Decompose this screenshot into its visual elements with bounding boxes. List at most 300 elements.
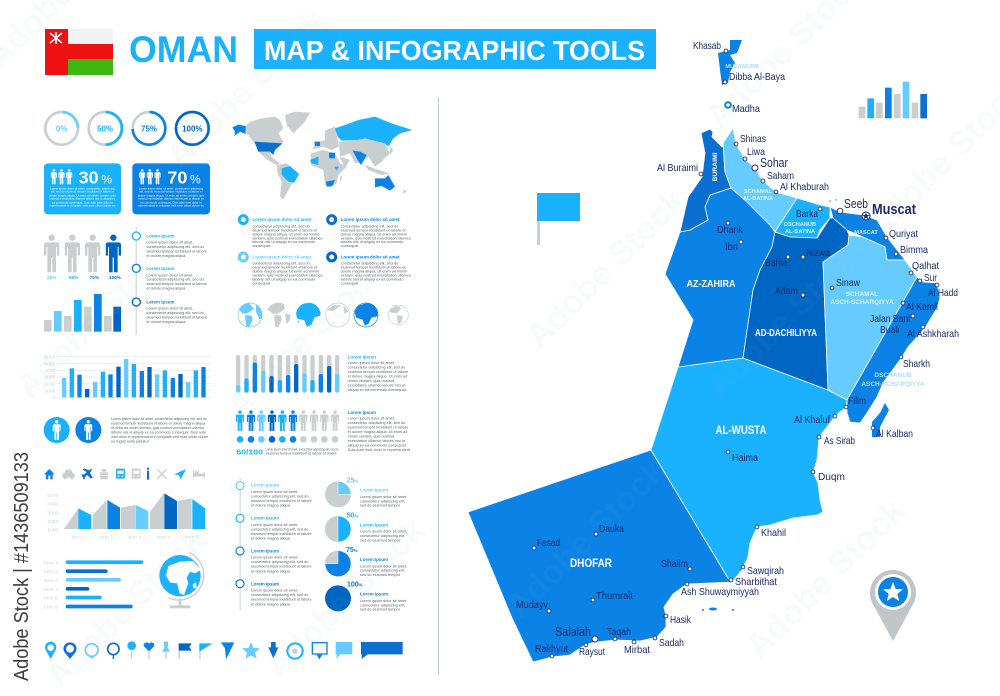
area column chart: 2000- — [47, 519, 60, 525]
icon: ring pin dark — [108, 643, 119, 659]
region labels: SCHAMAL — [744, 189, 773, 195]
city labels: Bimma — [900, 245, 928, 256]
city labels: Shinas — [740, 134, 766, 145]
small islands — [702, 199, 837, 611]
bullet text block 2: laboris nisi ut aliquip ex ea commodo — [341, 240, 403, 244]
city labels: Jalan Bani — [870, 314, 910, 325]
stat box 30%: reprehenderit in voluptate velit esse cillum dolore eu — [49, 204, 116, 208]
city labels: Ash Shuwaymiyyah — [681, 587, 759, 598]
bullet text block 4: consequat — [341, 281, 359, 285]
region labels: MUSANDAM — [725, 64, 759, 70]
city labels: Taqah — [607, 627, 631, 638]
small column chart top right — [859, 82, 927, 118]
city labels: Dhank — [717, 225, 744, 236]
region labels: BURAIMI — [712, 152, 719, 182]
paragraph beside badges: Ut enim ad minim veniam, quis nostrud exercitation ullamco — [111, 426, 204, 430]
city labels: Dibba Al-Baya — [729, 72, 785, 83]
stat box 70%: Lorem ipsum dolor sit amet, consectetur adipiscing — [139, 186, 204, 190]
pie 50%: sed do eiusmod tempor — [360, 538, 401, 542]
stat box 70%: 70 — [167, 168, 187, 188]
divider line — [438, 98, 439, 675]
area column chart: Item 5 — [185, 535, 199, 541]
vertical timeline: et dolore magna aliqua — [146, 254, 186, 258]
horizontal item bars: Item 2 — [44, 569, 58, 575]
bullet text block 4: Lorem ipsum dolor sit amet — [341, 254, 400, 259]
timeline with four steps: consectetur adipiscing elit, sed do — [251, 593, 308, 597]
pie 100%: Lorem Ipsum — [360, 592, 388, 597]
city labels: Ibri — [725, 242, 738, 253]
bullet text block 3: dolore magna aliqua. Ut enim ad minim — [252, 270, 319, 274]
people row 60 of 100: eiusmod tempor incididunt ut labore et dolore — [266, 451, 337, 455]
region labels: DSCHANUB — [874, 372, 912, 379]
pie 75%: Lorem Ipsum — [360, 557, 388, 562]
bullet text block 4: laboris nisi ut aliquip ex ea commodo — [341, 277, 403, 281]
pie 50%: consectetur adipiscing elit, — [360, 534, 405, 538]
city labels: Adam — [775, 286, 798, 297]
horizontal item bars: Item 5 — [44, 596, 58, 602]
stat box 30%: elit, sed do eiusmod tempor incididunt ut labore et — [51, 190, 114, 194]
stat box 70%: elit, sed do eiusmod tempor incididunt ut labore et — [139, 190, 203, 194]
pie 25%: consectetur adipiscing elit, — [360, 499, 405, 503]
city labels: Sharbithat — [735, 577, 777, 588]
bullet text block 1 — [239, 216, 323, 248]
pie 75%: sed do eiusmod tempor — [360, 573, 401, 577]
pie 75% — [325, 547, 407, 577]
donut 75% — [133, 112, 165, 145]
timeline with four steps: et dolore magna aliqua — [251, 504, 291, 508]
city labels: Sinaw — [836, 278, 861, 289]
text beside people row: Duis aute irure dolor in reprehenderit — [348, 448, 411, 452]
stat box 70%: dolore magna aliqua. Ut enim ad minim veniam, quis — [138, 193, 205, 197]
stock credit vertical text: Adobe Stock | #1436509133 — [11, 452, 33, 681]
area column chart: Item 1 — [71, 535, 85, 541]
city labels — [516, 41, 959, 658]
people row 60 of 100 — [236, 410, 339, 456]
donut 100% — [176, 112, 209, 145]
stat box 30%: dolore magna aliqua. Ut enim ad minim veniam, quis — [49, 193, 116, 197]
stat box 70%: % — [190, 173, 201, 187]
pie 100%: sed do eiusmod tempor — [360, 608, 401, 612]
region labels: DHOFAR — [570, 556, 612, 570]
region labels: ASCH-SCHARQIYYA — [830, 299, 894, 306]
timeline with four steps: et dolore magna aliqua — [251, 602, 291, 606]
bullet text block 2: dolore magna aliqua. Ut enim ad minim — [341, 232, 407, 236]
region: Schamal Al-Batina — [723, 128, 797, 232]
region: Buraimi — [680, 129, 731, 232]
vertical timeline: Lorem Ipsum — [146, 233, 175, 238]
column chart with axis: 4000 — [44, 368, 56, 374]
vertical timeline: Lorem ipsum dolor sit amet, — [146, 307, 194, 311]
stat box 30%: Lorem ipsum dolor sit amet, consectetur adipiscing — [50, 186, 115, 190]
region labels: AL-BATINA — [743, 196, 773, 202]
icon: target ring — [287, 643, 303, 659]
vertical timeline: eiusmod tempor incididunt ut labore — [146, 315, 207, 319]
timeline with four steps — [236, 478, 312, 610]
pie 100%: 100% — [347, 582, 363, 589]
region labels: AL-BATINA — [785, 229, 815, 235]
timeline with four steps: consectetur adipiscing elit, sed do — [251, 527, 308, 531]
area column chart: 4000- — [47, 502, 60, 508]
donut 0%: 0% — [56, 124, 67, 133]
icon: push pin — [162, 642, 170, 659]
paragraph beside badges: laboris nisi ut aliquip ex ea commodo consequat. Duis aute — [111, 430, 206, 434]
text: Adobe Stock — [219, 252, 393, 426]
timeline with four steps: Lorem Ipsum — [251, 483, 279, 488]
text: Adobe Stock — [39, 522, 213, 696]
pie 75%: 75% — [346, 547, 358, 554]
timeline with four steps: Lorem Ipsum — [251, 581, 279, 586]
icon: outlined speech box — [312, 643, 327, 659]
city labels: Liwa — [747, 147, 765, 158]
area column chart: Item 4 — [156, 535, 170, 541]
stat box 30%: 30 — [79, 168, 99, 188]
pie 75%: consectetur adipiscing elit, — [360, 569, 405, 573]
vertical timeline: Lorem ipsum dolor sit amet, — [146, 241, 194, 245]
pie 75%: Lorem ipsum dolor sit amet, — [360, 564, 407, 568]
map of Oman — [468, 40, 959, 662]
vertical timeline: eiusmod tempor incididunt ut labore — [146, 282, 207, 286]
bullet text block 3: veniam, quis nostrud exercitation ullamco — [252, 274, 323, 278]
bullet text block 2: consequat — [341, 244, 359, 248]
stat box 30% — [44, 163, 121, 214]
bullet text block 3: Lorem ipsum dolor sit amet — [252, 254, 312, 259]
icon: location pin with star — [870, 570, 916, 641]
people percentage figures: 75% — [90, 275, 100, 280]
city labels: Mirbat — [624, 645, 650, 656]
text beside people row: Lorem Ipsum — [348, 410, 376, 415]
horizontal item bars: Item 3 — [44, 578, 58, 584]
city labels: Al Kalban — [876, 429, 913, 440]
bullet text block 3: eiusmod tempor incididunt ut labore et — [252, 266, 318, 270]
region labels: ASCH-SCHARQIYYA — [861, 381, 925, 388]
icon: plane — [81, 468, 93, 479]
city labels: Thumrait — [596, 591, 633, 602]
region: Dschanub Asch-Scharqiyya — [847, 277, 940, 423]
timeline with four steps: Lorem Ipsum — [251, 548, 279, 553]
city labels: Sur — [924, 273, 937, 284]
horizontal item bars: Item 6 — [44, 605, 58, 611]
pie 25%: 25% — [347, 478, 358, 485]
icon: dark flag — [179, 643, 192, 659]
vertical timeline: consectetur adipiscing elit, sed do — [146, 311, 204, 315]
timeline with four steps: consectetur adipiscing elit, sed do — [251, 560, 308, 564]
city labels: Sohar — [760, 155, 789, 170]
city labels: As Sirab — [824, 436, 855, 447]
vertical timeline: Lorem ipsum dolor sit amet, — [146, 273, 194, 277]
paragraph beside badges: eu fugiat nulla pariatur. — [111, 439, 150, 443]
pie 25%: Lorem Ipsum — [360, 488, 388, 493]
title banner: MAP & INFOGRAPHIC TOOLS — [264, 35, 645, 66]
text: Adobe Stock — [519, 182, 693, 356]
city labels: Dauka — [599, 524, 624, 535]
text beside progress bars: Lorem Ipsum — [348, 354, 376, 359]
region labels: DSCHANUB — [784, 222, 816, 228]
text beside people row: Lorem ipsum dolor sit amet, — [348, 417, 395, 421]
region labels: AD-DACHILIYYA — [755, 328, 817, 339]
icon: capital star marker — [862, 212, 870, 220]
horizontal item bars: Item 1 — [44, 560, 58, 566]
bullet text block 2 — [328, 216, 411, 248]
bullet text block 3: consectetur adipiscing elit, sed do — [252, 262, 310, 266]
bullet text block 1: dolore magna aliqua. Ut enim ad minim — [252, 232, 319, 236]
timeline with four steps: et dolore magna aliqua — [251, 537, 291, 541]
city labels: Al Buraimi — [657, 163, 698, 174]
region labels: AZ-ZAHIRA — [686, 278, 736, 290]
panel: people, bars and column charts — [44, 227, 211, 443]
text beside progress bars: aliquip ex ea commodo consequat. — [348, 388, 407, 392]
vertical timeline: consectetur adipiscing elit, sed do — [146, 278, 204, 282]
panel: world map and text blocks — [232, 112, 412, 327]
bullet text block 1: consequat — [252, 244, 271, 248]
icon: paper plane — [174, 469, 186, 480]
stat box 70%: ea commodo consequat. Duis aute irure dolor in — [141, 200, 202, 204]
city labels: Fasad — [537, 538, 560, 549]
people row 60 of 100: Lorem ipsum dolor sit amet, consectetur adipiscing elit, sed do — [266, 447, 338, 451]
city labels: Quriyat — [889, 229, 918, 240]
pie 50%: Lorem Ipsum — [360, 522, 388, 527]
bullet text block 3: laboris nisi ut aliquip ex ea commodo — [252, 277, 315, 281]
text beside progress bars: minim veniam, quis nostrud — [348, 379, 394, 383]
bullet text block 4: consectetur adipiscing elit, sed do — [341, 262, 398, 266]
region: Mascat — [830, 207, 905, 260]
icon: banner speech box — [361, 642, 403, 659]
timeline with four steps: Lorem ipsum dolor sit amet, — [251, 589, 298, 593]
paragraph beside badges: irure dolor in reprehenderit in voluptate velit esse cillum dolore — [111, 435, 208, 439]
icon: Madha enclave — [724, 101, 732, 109]
pins row — [45, 641, 213, 659]
pie 50%: 50% — [347, 512, 358, 519]
city labels: Nizwa — [806, 248, 830, 259]
city labels: Saham — [767, 171, 794, 182]
column chart with axis: 1000 — [44, 388, 56, 394]
globes row — [237, 302, 408, 327]
panel: percentage donuts and stat boxes — [44, 112, 210, 214]
city labels: Muscat — [872, 201, 916, 218]
bullet text block 1: veniam, quis nostrud exercitation ullamco — [252, 236, 323, 240]
panel: timeline, pies and shape icons — [221, 478, 407, 659]
icon: train — [132, 469, 141, 479]
area column chart: 3000- — [47, 510, 60, 516]
stat box 30%: ea commodo consequat. Duis aute irure dolor in — [52, 200, 113, 204]
icon: heart pin — [144, 642, 154, 659]
text beside people row: eiusmod tempor incididunt ut labore — [348, 426, 408, 430]
column chart with axis: 2000 — [44, 381, 56, 387]
bullet text block 3 — [239, 253, 323, 285]
bullet text block 2: consectetur adipiscing elit, sed do — [341, 224, 398, 228]
text: Adobe Stock — [9, 232, 183, 406]
city labels: Al Khaburah — [780, 182, 829, 193]
bullet text block 3: consequat — [252, 281, 271, 285]
city dots — [532, 49, 939, 658]
bullet text block 1: eiusmod tempor incididunt ut labore et — [252, 228, 318, 232]
city labels: Mudayy — [516, 600, 549, 611]
text: Adobe Stock — [259, 512, 433, 686]
icon: bed — [193, 470, 205, 478]
icon: ship — [99, 469, 109, 479]
pie 100% — [325, 582, 407, 612]
region labels — [570, 64, 925, 570]
region: Az-Zahira — [665, 188, 775, 367]
text beside progress bars: et dolore magna aliqua. Ut enim ad — [348, 375, 407, 379]
city labels: Al Khaluf — [794, 415, 830, 426]
icon: bus — [116, 469, 125, 479]
world map — [232, 112, 412, 199]
person badges — [44, 417, 101, 443]
timeline with four steps: Lorem ipsum dolor sit amet, — [251, 490, 298, 494]
bullet text block 4: dolore magna aliqua. Ut enim ad minim — [341, 270, 407, 274]
icon: drop pin sky — [45, 642, 56, 659]
bullet text block 2: Lorem ipsum dolor sit amet — [341, 217, 400, 222]
city labels: Seeb — [844, 197, 868, 211]
region labels: SCHAMAL — [846, 291, 878, 298]
icon: map flag — [537, 193, 580, 245]
text beside people row: minim veniam, quis nostrud — [348, 435, 394, 439]
region: Musandam — [718, 40, 742, 85]
timeline with four steps: consectetur adipiscing elit, sed do — [251, 494, 308, 498]
icon: ball pin — [127, 641, 136, 659]
region: Schamal Asch-Scharqiyya — [823, 235, 917, 400]
bullet text block 2: eiusmod tempor incididunt ut labore et — [341, 228, 407, 232]
flag of Oman — [45, 29, 113, 75]
rounded progress bars — [236, 355, 339, 393]
pie 50% — [325, 512, 407, 542]
vertical timeline: eiusmod tempor incididunt ut labore — [146, 249, 207, 253]
timeline with four steps: Lorem ipsum dolor sit amet, — [251, 523, 298, 527]
column chart with axis: 0 — [53, 395, 56, 401]
people percentage figures: 100% — [109, 275, 122, 280]
icon: car — [62, 470, 75, 479]
region: Dschanub Al-Batina — [775, 198, 830, 238]
timeline with four steps: et dolore magna aliqua — [251, 569, 291, 573]
panel: icons, area chart, item bars, globe and pins — [44, 468, 213, 659]
bullet text block 4: veniam, quis nostrud exercitation ullamco — [341, 274, 411, 278]
city labels: Buali — [880, 325, 899, 336]
people row 60 of 100: 60/100 — [236, 447, 263, 456]
timeline with four steps: Lorem Ipsum — [251, 516, 279, 521]
icon: arrowhead — [221, 642, 234, 659]
city labels: Sawqirah — [747, 566, 784, 577]
area column chart — [47, 493, 205, 541]
timeline with four steps: eiusmod tempor incididunt ut labore — [251, 598, 312, 602]
icon: desk globe — [159, 553, 204, 608]
region labels: MASCAT — [854, 230, 878, 236]
region: Ad-Dachiliyya — [743, 218, 849, 390]
city labels: Bahla — [765, 258, 787, 269]
timeline with four steps: eiusmod tempor incididunt ut labore — [251, 499, 312, 503]
icon: light speech box — [336, 642, 352, 659]
city labels: Al Hadd — [928, 288, 958, 299]
horizontal item bars — [44, 560, 143, 611]
bar chart small — [44, 294, 121, 332]
text beside progress bars: exercitation ullamco laboris nisi ut — [348, 384, 406, 388]
pie 100%: Lorem ipsum dolor sit amet, — [360, 599, 407, 603]
donut 0% — [45, 112, 78, 145]
city labels: Duqm — [818, 472, 845, 483]
donut 100%: 100% — [182, 124, 203, 133]
column chart with axis: 6000 — [44, 354, 56, 360]
icon: information — [147, 468, 149, 480]
timeline with four steps: eiusmod tempor incididunt ut labore — [251, 532, 312, 536]
people percentage figures: 50% — [69, 275, 79, 280]
stat box 70%: nostrud exercitation ullamco laboris nisi ut aliquip ex — [138, 197, 205, 201]
vertical timeline: Lorem Ipsum — [146, 299, 175, 304]
city labels: Khasab — [693, 41, 721, 52]
column chart with axis — [44, 354, 211, 401]
city labels: Barka — [796, 209, 818, 220]
text beside people row — [348, 410, 411, 452]
city labels: Hasik — [670, 615, 692, 626]
bullet text block 1: consectetur adipiscing elit, sed do — [252, 224, 310, 228]
city labels: Filim — [848, 396, 866, 407]
city labels: Qalhat — [912, 261, 939, 272]
pie 25%: Lorem ipsum dolor sit amet, — [360, 495, 407, 499]
pie 100%: consectetur adipiscing elit, — [360, 603, 405, 607]
text beside people row: exercitation ullamco laboris nisi ut — [348, 439, 406, 443]
donut 75%: 75% — [141, 124, 157, 133]
city labels: Khahil — [761, 528, 786, 539]
city labels: Sharkh — [903, 359, 930, 370]
city labels: Rakhyut — [535, 644, 568, 655]
area column chart: Item 3 — [127, 535, 141, 541]
text beside people row: consectetur adipiscing elit, sed do — [348, 421, 405, 425]
text: Adobe Stock — [699, 232, 873, 406]
icon: star — [242, 642, 260, 659]
column chart with axis: 3000 — [44, 375, 56, 381]
people percentage figures — [44, 234, 122, 280]
people percentage figures: 25% — [47, 275, 57, 280]
stat box 70% — [132, 163, 210, 214]
city labels: Al Kamil — [906, 302, 938, 313]
bullet text block 2: veniam, quis nostrud exercitation ullamco — [341, 236, 411, 240]
timeline with four steps: eiusmod tempor incididunt ut labore — [251, 565, 312, 569]
city labels: Haima — [732, 453, 758, 464]
timeline with four steps: Lorem ipsum dolor sit amet, — [251, 556, 298, 560]
city labels: Al Ashkharah — [907, 329, 959, 340]
text beside people row: aliquip ex ea commodo consequat. — [348, 444, 407, 448]
column chart with axis: 5000 — [44, 361, 56, 367]
area column chart: 5000- — [47, 493, 60, 499]
vertical timeline: et dolore magna aliqua — [146, 320, 186, 324]
stat box 30%: nostrud exercitation ullamco laboris nisi ut aliquip ex — [49, 197, 116, 201]
text beside progress bars: eiusmod tempor incididunt ut labore — [348, 370, 408, 374]
horizontal item bars: Item 4 — [44, 587, 58, 593]
bullet text block 1: laboris nisi ut aliquip ex ea commodo — [252, 240, 315, 244]
vertical timeline: consectetur adipiscing elit, sed do — [146, 245, 204, 249]
region: Dhofar — [468, 450, 732, 662]
city labels: Raysut — [579, 647, 605, 658]
region labels: AL-WUSTA — [716, 423, 767, 437]
bullet text block 1: Lorem ipsum dolor sit amet — [252, 217, 312, 222]
paragraph beside badges: eiusmod tempor incididunt ut labore et dolore magna aliqua. — [111, 421, 206, 425]
icon: drop pin mid — [63, 642, 77, 659]
bullet text block 4 — [328, 253, 411, 285]
text beside progress bars: Lorem ipsum dolor sit amet, — [348, 361, 395, 365]
pie 25%: sed do eiusmod tempor — [360, 504, 401, 508]
area column chart: Item 2 — [99, 535, 113, 541]
text beside progress bars — [348, 354, 408, 392]
pie 50%: Lorem ipsum dolor sit amet, — [360, 530, 407, 534]
icon: house — [44, 469, 55, 479]
text: Adobe Stock — [499, 452, 673, 626]
bullet text block 4: eiusmod tempor incididunt ut labore et — [341, 266, 407, 270]
text beside people row: et dolore magna aliqua. Ut enim ad — [348, 430, 407, 434]
paragraph beside badges — [111, 417, 208, 443]
region: Al-Wusta — [651, 358, 847, 582]
region: Masirah island — [872, 403, 889, 437]
city labels: Shalim — [661, 559, 688, 570]
city labels: Sadah — [659, 638, 684, 649]
vertical timeline: Lorem Ipsum — [146, 266, 175, 271]
